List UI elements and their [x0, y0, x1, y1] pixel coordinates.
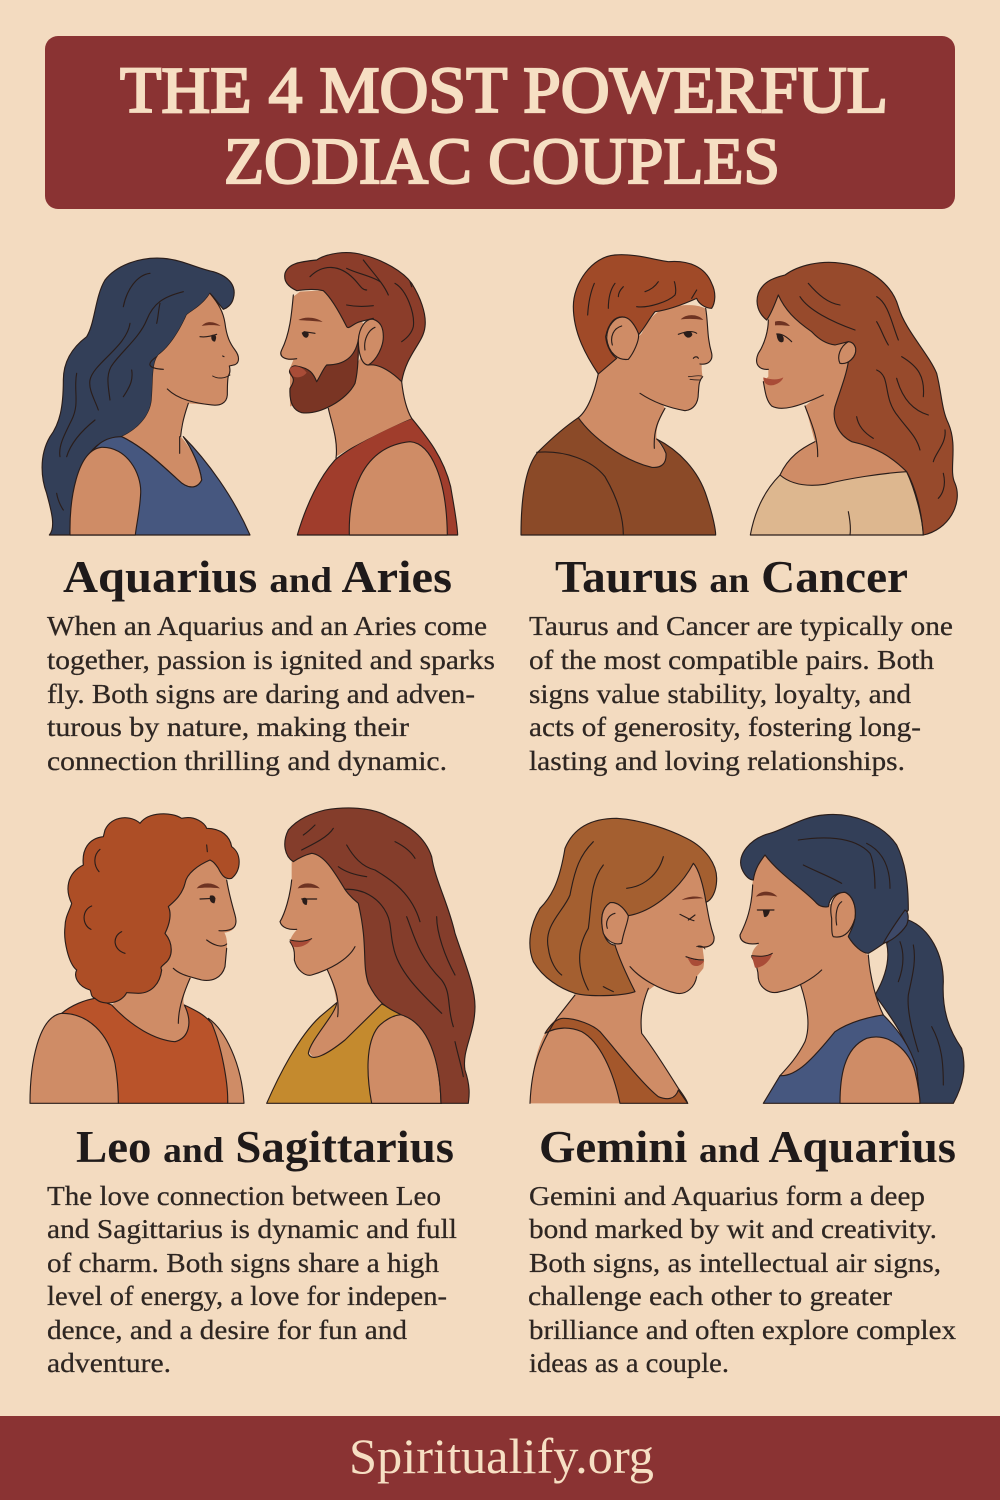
- text: Leo and Sagittarius description: The love connection between Leo: [47, 1181, 441, 1211]
- heading: Leo and Sagittarius: Leo and Sagittarius: [76, 1122, 454, 1172]
- text: Taurus and Cancer description: acts of generosity, fostering long-: [529, 712, 921, 742]
- text: Gemini and Aquarius description: Gemini and Aquarius form a deep: [529, 1181, 925, 1211]
- illustration: Taurus and Cancer couple: [521, 255, 957, 535]
- heading: Taurus an Cancer: Taurus an Cancer: [555, 552, 908, 602]
- woman with wavy auburn hair: [750, 262, 957, 535]
- woman with navy hair: [42, 258, 250, 535]
- footer band: Spiritualify.org: [349, 1428, 654, 1484]
- heading: Aquarius and Aries: Aquarius and Aries: [63, 552, 452, 602]
- text: Leo and Sagittarius description: level of energy, a love for indepen-: [47, 1281, 447, 1311]
- text: Leo and Sagittarius description: and Sagittarius is dynamic and full: [47, 1214, 457, 1244]
- text: Gemini and Aquarius description: bond marked by wit and creativity.: [529, 1214, 937, 1244]
- text: Aquarius and Aries description: [47, 611, 495, 776]
- footer band: [0, 1416, 1000, 1500]
- text: Taurus and Cancer description: lasting and loving relationships.: [529, 746, 905, 776]
- text: Taurus and Cancer description: signs value stability, loyalty, and: [529, 679, 912, 709]
- text: Leo and Sagittarius description: of charm. Both signs share a high: [47, 1248, 440, 1278]
- text: Leo and Sagittarius description: [47, 1181, 457, 1378]
- text: Aquarius and Aries description: connection thrilling and dynamic.: [47, 746, 447, 776]
- title banner: THE 4 MOST POWERFUL: [120, 54, 888, 127]
- text: Gemini and Aquarius description: ideas as a couple.: [529, 1348, 729, 1378]
- illustration: Gemini and Aquarius couple: [530, 814, 964, 1103]
- text: Aquarius and Aries description: together, passion is ignited and sparks: [47, 645, 495, 675]
- text: Aquarius and Aries description: turous by nature, making their: [47, 712, 409, 742]
- text: Taurus and Cancer description: Taurus and Cancer are typically one: [529, 611, 953, 641]
- woman with long maroon hair: [267, 808, 475, 1103]
- text: Aquarius and Aries description: fly. Both signs are daring and adven-: [47, 679, 475, 709]
- illustration: Leo and Sagittarius couple: [30, 808, 475, 1103]
- man with beard: [281, 253, 458, 535]
- title banner: [45, 36, 955, 209]
- person with curly hair: [30, 814, 244, 1103]
- text: Taurus and Cancer description: [529, 611, 953, 776]
- text: Leo and Sagittarius description: dence, and a desire for fun and: [47, 1315, 408, 1345]
- woman with navy ponytail: [740, 814, 964, 1103]
- text: Leo and Sagittarius description: adventure.: [47, 1348, 171, 1378]
- text: Gemini and Aquarius description: challenge each other to greater: [528, 1281, 892, 1311]
- text: Aquarius and Aries description: When an Aquarius and an Aries come: [47, 611, 487, 641]
- title banner: ZODIAC COUPLES: [224, 125, 780, 198]
- woman with bob haircut: [530, 818, 717, 1103]
- text: Taurus and Cancer description: of the most compatible pairs. Both: [529, 645, 935, 675]
- heading: Gemini and Aquarius: Gemini and Aquarius: [539, 1122, 956, 1172]
- text: Gemini and Aquarius description: [528, 1181, 957, 1378]
- man with short auburn hair: [521, 255, 716, 535]
- text: Gemini and Aquarius description: Both signs, as intellectual air signs,: [529, 1248, 941, 1278]
- illustration: Aquarius and Aries couple: [42, 253, 458, 535]
- text: Gemini and Aquarius description: brilliance and often explore complex: [529, 1315, 957, 1345]
